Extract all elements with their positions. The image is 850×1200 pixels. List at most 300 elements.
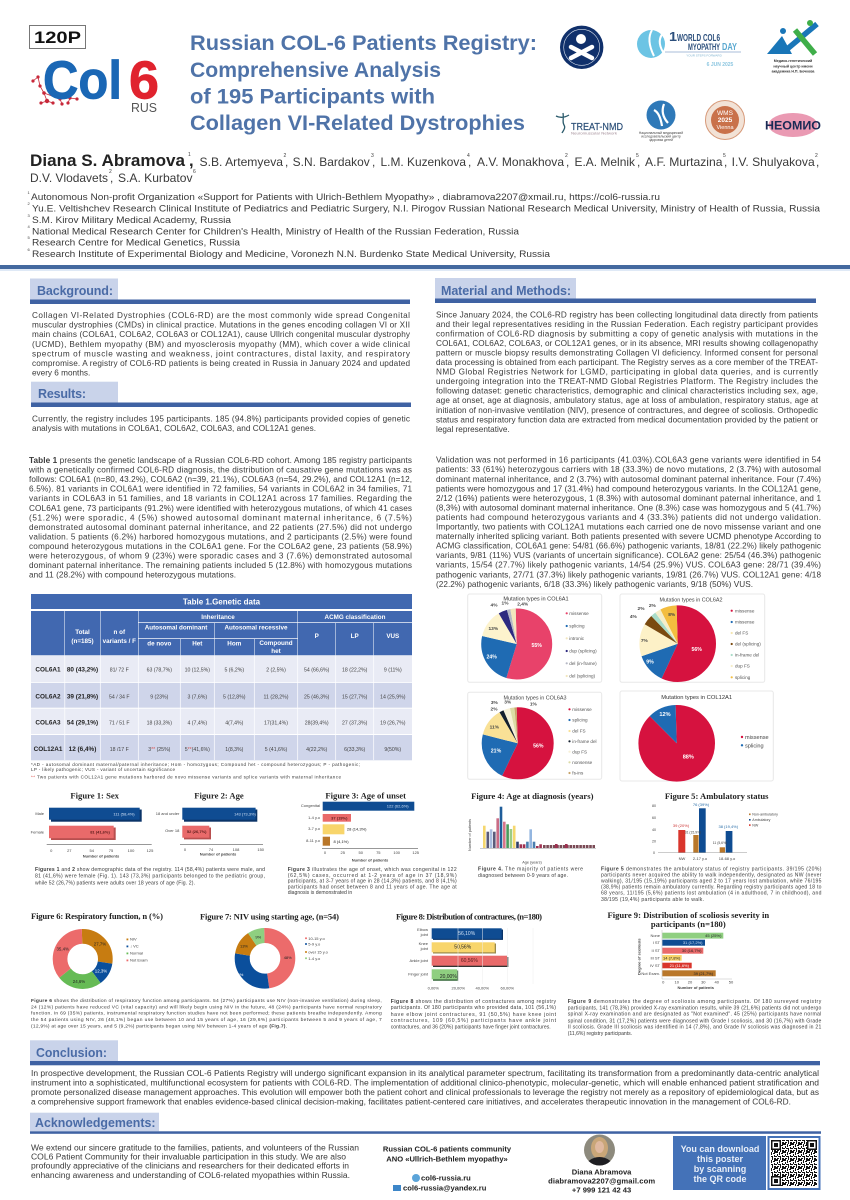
table: genetic data: P: [315, 633, 319, 640]
logo: NEOMIO: НЕОМИО: [765, 118, 821, 132]
table row: COL6A1: 81/ 72 F: [110, 668, 129, 674]
authors: ,: [110, 171, 113, 185]
chart: contractures bars: 50,56%: [454, 944, 472, 950]
chart: mutation types in COL6A3: 21%: [491, 748, 502, 754]
caption: figures 6 and 7: [31, 998, 382, 1030]
text: methods: legal representative.: [436, 425, 510, 434]
chart: mutation types in COL6A3: splicing: [572, 718, 588, 723]
chart: scoliosis severity bars: 31 (17,2%): [683, 940, 703, 945]
table: genetic data: Inheritance: [201, 614, 235, 621]
table row: COL6A2: 39 (21,8%): [67, 694, 98, 700]
text: methods: Since January 2024, the COL6-RD registry has been collecting longitudinal data directly from patients: [436, 310, 818, 319]
heading: figure 6: Figure 6: Respiratory function, n (%): [31, 911, 163, 921]
chart: NIV starting age donut: 48%: [284, 955, 292, 960]
heading: figure 1: Figure 1: Sex: [70, 790, 120, 800]
chart: mutation types in COL6A2: 56%: [692, 647, 702, 653]
poster number badge: 120P: [34, 28, 81, 47]
table footnotes: [31, 762, 360, 780]
chart: mutation types in COL6A2: del (splicing): [735, 642, 761, 647]
text: table 1 description: [28, 456, 412, 580]
chart: age of onset bars: 1-4 y.o: [308, 815, 321, 820]
caption: figure 5: (38,9%) patients remain ambulatory currently. Regarding registry participants aged 18 to: [601, 885, 822, 891]
table row: COL6A1: 10 (12,5%): [185, 668, 210, 674]
caption: figure 8: have elbow joint contractures, 91 (50,5%) have knee joint: [391, 1012, 557, 1018]
logo: national medical centre: Национальный медицинский: [639, 131, 683, 135]
icon: email envelope: [393, 1185, 401, 1191]
table row: COL12A1: 1(8,3%): [225, 747, 244, 753]
Col6 RUS logo: Col: [43, 50, 122, 110]
chart: NIV starting age donut: 5-9 y.o: [308, 942, 321, 946]
table row: COL6A2: 15 (27,7%): [342, 694, 368, 700]
authors: D.V. Vlodavets: [30, 171, 108, 185]
chart: mutation types in COL6A3: Mutation types in COL6A3: [504, 696, 566, 702]
icon: website globe: [412, 1174, 420, 1182]
panel: acknowledgements: [30, 1113, 821, 1180]
table row: COL12A1: 18 /17 F: [110, 747, 129, 753]
caption: figure 5: Figure 5 demonstrates the ambulatory status of registry participants. 39/195 (20%): [601, 866, 822, 872]
caption: figure 9: Figure 9 demonstrates the degree of scoliosis among participants. Of 180 surveyed registry: [568, 999, 822, 1005]
chart: scoliosis severity bars: None: [650, 933, 661, 938]
text: methods: undergoing integration into the TREAT-NMD Global Registries Platform. The Registry includes the: [436, 377, 818, 386]
chart: mutation types in COL6A1: dup (splicing): [569, 649, 597, 654]
chart: scoliosis severity bars: 45 (25%): [705, 933, 722, 938]
table row: COL6A1: COL6A1: [35, 666, 61, 674]
text: results: analysis with mutations in COL6A1, COL6A2, COL6A3, and COL12A1 genes.: [32, 424, 316, 433]
author contacts: diabramova2207@gmail.com: [548, 1176, 655, 1186]
chart: respiratory function donut: NIV: [130, 937, 137, 942]
text: conclusion: a comprehensive support framework that enables evidence-based clinical decision-making, facilitates patient-centered care initiatives, and accelerates therapeutic innovation in the management of COL6-RD.: [31, 1098, 791, 1107]
caption: figure 9: participants, 141 (78,3%) provided X-ray examination results, while 39 (21,6%) patients did not undergo: [568, 1005, 821, 1011]
panel: material and methods: [435, 278, 819, 434]
text: background: (UCMD), Bethlem myopathy (BM) and myosclerosis myopathy (MM), which cover a wide clinical: [32, 340, 410, 349]
text: table 1 description: with a genetically confirmed COL6-RD diagnosis, the distribution of causative gene mutations was as: [28, 466, 412, 475]
chart: age at diagnosis bars: Number of patients: [468, 819, 472, 851]
chart: mutation types in COL12A1: [620, 691, 773, 781]
chart: mutation types in COL12A1: 12%: [659, 712, 671, 718]
chart: mutation types in COL6A2: missense: [735, 620, 755, 625]
table row: COL6A1: 9 (11%): [384, 668, 402, 674]
caption: figures 6 and 7: Figure 6 shows the distribution of respiratory function among participants. 54 (27%) participants use NIV (non-invasive ventilation) during sleep,: [31, 998, 382, 1004]
table: genetic data: Total: [75, 629, 90, 636]
table row: COL12A1: [34, 746, 401, 753]
text: methods: and their legal representatives residing in the Russian Federation. Each registry participant provides: [436, 320, 818, 329]
text: validation and ACMG classification: Validation was not performed in 16 participants (41.03%).COL6A3 gene variants were identified in 54: [436, 456, 821, 465]
logo: World COL6 Myopathy Day: YOUR STEPS FORWARD: [686, 54, 723, 58]
poster number badge: [30, 26, 86, 48]
chart: ambulatory status bars: Ambulatory: [752, 818, 771, 822]
table row: COL6A3: 28(39,4%): [305, 720, 329, 726]
chart: contractures bars: joint: [420, 946, 429, 951]
chart: sex bars: 125: [147, 848, 154, 853]
text: methods: NMD Global Registries Network for LGMD, participating in global data queries, and is currently: [436, 368, 819, 377]
community contact block: Russian COL-6 patients community: [383, 1144, 512, 1153]
authors: S.B. Artemyeva: [200, 155, 283, 169]
table row: COL6A2: 25 (46,3%): [304, 694, 330, 700]
community contact block: col6-russia@yandex.ru: [403, 1184, 487, 1193]
chart: mutation types in COL6A3: 11%: [490, 724, 500, 730]
chart: age of onset bars: 8 (4,1%): [333, 839, 349, 844]
Col6 RUS logo: RUS: [131, 100, 157, 115]
logo: World COL6 Myopathy Day: 1: [669, 29, 677, 44]
table: genetic data: n of: [114, 629, 126, 636]
chart: age of onset bars: 8-11 y.o: [306, 838, 321, 843]
chart: sex bars: 111 (58,4%): [113, 812, 135, 816]
heading: acknowledgements: [30, 1113, 821, 1134]
logo: patient organization emblem: [560, 26, 603, 69]
chart: scoliosis severity bars: 40: [714, 980, 720, 984]
chart: age of onset bars: 25: [340, 850, 346, 855]
heading: figure 9: [607, 910, 769, 929]
caption: figure 5: 68 years, 11/195 (5,6%) patients lost ambulation (4 in adulthood, 7 in childhood), and: [601, 891, 822, 897]
authors: 5: [636, 153, 639, 159]
chart: ambulatory status bars: 39 (20%): [673, 823, 690, 828]
text: validation and ACMG classification: Importantly, two patients with COL12A1 mutations each carried one de novo missense variant and one: [436, 522, 821, 532]
table: genetic data: Autosomal recessive: [224, 624, 288, 632]
chart: mutation types in COL12A1: Mutation types in COL12A1: [661, 695, 732, 701]
authors: 4: [467, 153, 470, 159]
text: conclusion: instrument into a sophisticated, multifunctional ecosystem for patients with COL6-RD. The implementation of additional clinico-phenotypic, molecular-genetic, which will enable enhanced patient stratification and: [31, 1078, 819, 1088]
chart: age of onset bars: Congenital: [301, 803, 320, 808]
chart: contractures bars: 56,10%: [458, 931, 476, 937]
caption: figure 4: diagnosed between 0-9 years of age.: [478, 873, 568, 879]
chart: respiratory function donut: [56, 936, 148, 984]
chart: mutation types in COL6A3: in-frame del: [572, 739, 597, 744]
heading: figure 5: Figure 5: Ambulatory status: [665, 791, 769, 801]
logo: World COL6 Myopathy Day: DAY: [722, 42, 737, 53]
text: validation and ACMG classification: variants, 9/81 (11%) VUS (variants of uncertain significance). COL6A2 gene: 25/54 (46.3%) pathogenic: [436, 551, 821, 560]
table row: COL6A1: 2 (2,5%): [266, 668, 286, 674]
table row: COL6A1: [35, 666, 402, 674]
chart: age bars: Over 18: [165, 828, 180, 833]
text: table 1 description: 6.5%). 81 variants in COL6A1 were identified in 72 families, 54 variants in COL6A2 in 34 families, 71: [29, 485, 412, 494]
authors: ,: [637, 155, 640, 169]
table row: COL6A2: 11 (28,2%): [264, 694, 289, 700]
chart: mutation types in COL6A1: splicing: [569, 624, 585, 629]
chart: ambulatory status bars: 80: [652, 804, 656, 808]
authors: ,: [816, 155, 819, 169]
chart: scoliosis severity bars: 10: [674, 980, 680, 984]
table row: COL12A1: 6(33,3%): [344, 747, 365, 753]
chart: scoliosis severity bars: 50: [729, 980, 734, 984]
chart: ambulatory status bars: Non-ambulatory: [752, 812, 778, 816]
text: validation and ACMG classification: [436, 456, 821, 589]
chart: ambulatory status bars: NW: [679, 856, 686, 861]
chart: mutation types in COL6A3: missense: [572, 707, 592, 712]
text: methods: data processing is obtained from each participant. The Registry serves as a core member of the TREAT-: [436, 358, 818, 367]
title: Russian COL-6 Patients Registry:: [190, 31, 537, 55]
caption: figure 8: contractures, and 36 (20%) participants have finger joint contractures.: [391, 1025, 551, 1031]
chart: scoliosis severity bars: 14 (7,8%): [663, 955, 681, 960]
table: genetic data: ACMG classification: [325, 614, 386, 621]
chart: ambulatory status bars: 76 (39%): [693, 802, 710, 807]
chart: mutation types in COL12A1: missense: [745, 735, 769, 741]
chart: mutation types in COL6A3: 3%: [491, 700, 498, 706]
chart: ambulatory status bars: NW: [752, 823, 759, 827]
chart: respiratory function donut: Not Exam: [130, 958, 148, 963]
text: validation and ACMG classification: patients: 33 (61%) heterozygous carriers with 18 (33.3%) de novo mutations, 2 (3.7%) with autosomal: [436, 465, 821, 474]
heading: figure 9: Figure 9: Distribution of scoliosis severity in: [607, 910, 769, 920]
text: validation and ACMG classification: pathogenic variants, 27/71 (37.3%) likely pathogenic variants, 19/81 (26.7%) VUS. COL12A1 gene: 4/18: [436, 570, 821, 579]
table row: COL6A2: 54 / 34 F: [109, 694, 130, 700]
authors: S.A. Kurbatov: [118, 171, 193, 185]
chart: sex bars: Male: [35, 811, 45, 816]
caption: figures 6 and 7: function. In 69 (35%) patients, instrumental respiratory function studies have not been performed; these patients breathe independently. Among: [31, 1011, 382, 1017]
text: validation and ACMG classification: 2/12 (16%) patients were heterozygous, 1 (8.3%) with autosomal dominant paternal inheritance, and 1: [436, 494, 821, 503]
table: genetic data: de novo: [147, 640, 172, 648]
authors: ,: [285, 155, 288, 169]
heading: background: [30, 278, 410, 304]
chart: age bars: 143 (73,3%): [234, 812, 257, 816]
chart: mutation types in COL6A1: 1%: [502, 600, 509, 606]
logo: NEOMIO: [765, 113, 821, 137]
chart: mutation types in COL6A1: Mutation types in COL6A1: [503, 596, 569, 602]
author contacts: +7 999 121 42 43: [572, 1186, 631, 1194]
chart: age at diagnosis bars: Age (years): [522, 860, 543, 864]
chart: mutation types in COL6A1: 55%: [532, 643, 542, 649]
chart: mutation types in COL6A1: intronic: [569, 636, 585, 641]
community contact block: col6-russia.ru: [421, 1174, 471, 1182]
chart: contractures bars: 20,00%: [452, 986, 466, 990]
chart: mutation types in COL6A3: 56%: [533, 744, 544, 750]
logo: WMS 2025 Vienna: WMS: [717, 110, 734, 117]
text: validation and ACMG classification: patients were homozygous and 17 (31.4%) had compound heterozygous variants. In the COL12A1 gene,: [436, 484, 821, 493]
caption: figures 1 and 2: Figures 1 and 2 show demographic data of the registry. 114 (58,4%) patients were male, and: [35, 867, 265, 873]
chart: ambulatory status bars: [652, 802, 778, 861]
caption: figure 3: diagnosis is demonstrated in: [288, 890, 352, 896]
chart: age of onset bars: 37 (19%): [331, 815, 348, 820]
author photo: [584, 1134, 615, 1166]
panel: results: [31, 382, 411, 433]
chart: mutation types in COL6A2: 2%: [649, 603, 656, 609]
author contacts: Diana Abramova: [572, 1168, 632, 1176]
table row: COL6A3: 4(7,4%): [225, 720, 244, 726]
authors: 2: [565, 153, 568, 159]
text: validation and ACMG classification: dominant maternal inheritance, and 2 (3.7%) with autosomal dominant paternal inheritance. Four (7.4%): [436, 475, 821, 484]
heading: material and methods: Material and Methods:: [441, 284, 571, 298]
caption: figure 9: II scoliosis. Grade III scoliosis was identified in 14 (7,8%), and Grade IV scoliosis was diagnosed in 21: [568, 1025, 821, 1031]
text: table 1 description: dominant paternal inheritance. The remaining patients included 5 (12.8%) with homozygous mutations: [29, 561, 412, 570]
affiliations: [28, 190, 821, 260]
chart: NIV starting age donut: 1-4 y.o: [308, 956, 321, 961]
heading: figure 9: participants (n=180): [651, 919, 726, 929]
logo: TREAT-NMD: Neuromuscular Network: [571, 132, 617, 136]
heading: background: Background:: [37, 284, 113, 298]
chart: contractures bars: Finger joint: [408, 972, 429, 976]
caption: figures 1 and 2: 81 (41,6%) were female (Fig. 1). 143 (73,3%) participants belonged to the pediatric group,: [35, 874, 265, 880]
logo: medical genetics research centre: Медико-генетический: [774, 59, 812, 63]
caption: figure 3: participants had onset between 8 and 11 years of age. The age at: [288, 884, 457, 890]
text: methods: pattern or muscle biopsy results demonstrating Collagen VI deficiency. Informed consent for personal: [436, 348, 818, 358]
chart: age bars: 74: [209, 847, 214, 852]
chart: respiratory function donut: 27,7%: [94, 942, 106, 946]
QR code: [768, 1136, 820, 1190]
text: acknowledgements: We extend our sincere gratitude to the families, patients, and volunteers of the Russian: [31, 1144, 359, 1152]
caption: figures 6 and 7: 24 (12%) patients have reduced VC (vital capacity) and will likely begin using NIV in the future, 48 (24%) participants have normal respiratory: [31, 1004, 382, 1010]
chart: scoliosis severity bars: I ST: [653, 940, 661, 945]
table: genetic data: Compound: [259, 640, 293, 647]
chart: NIV starting age donut: 10-15 y.o: [308, 936, 325, 941]
chart: ambulatory status bars: 31 (15,9%): [685, 830, 701, 834]
chart: ambulatory status bars: 0: [653, 851, 655, 855]
text: acknowledgements: [31, 1144, 359, 1180]
table row: COL6A1: 18 (22,2%): [342, 668, 368, 674]
logo: World COL6 Myopathy Day: MYOPATHY: [688, 42, 720, 53]
authors: 2: [109, 169, 112, 175]
affiliations: 1: [28, 190, 30, 195]
chart: sex bars: Female: [31, 830, 45, 834]
table row: COL6A2: COL6A2: [35, 694, 61, 700]
chart: contractures bars: Ankle joint: [410, 958, 429, 963]
authors: Diana S. Abramova: [30, 152, 186, 170]
chart: ambulatory status bars: 2-17 y.o: [693, 856, 708, 861]
authors: ,: [372, 155, 375, 169]
authors: ,: [189, 152, 194, 170]
table: genetic data: Het: [192, 640, 203, 648]
heading: figure 7: Figure 7: NIV using starting age, (n=54): [200, 912, 339, 922]
heading: material and methods: [435, 278, 816, 303]
chart: scoliosis severity bars: Not Exam.: [641, 971, 660, 976]
title: [190, 31, 537, 135]
chart: scoliosis severity bars: II ST: [652, 948, 661, 953]
table: genetic data: Hom: [227, 640, 242, 648]
chart: contractures bars: 60,56%: [461, 958, 478, 964]
chart: scoliosis severity bars: Number of patients: [677, 985, 715, 990]
logo: TREAT-NMD: [556, 113, 623, 136]
table row: COL6A3: [35, 720, 406, 726]
author contacts: [548, 1168, 655, 1194]
caption: figure 3: (62,5%) cases, occurred at 1-2 years of age in 37 (18,9%): [288, 873, 457, 879]
heading: conclusion: [30, 1040, 820, 1065]
caption: figure 5: 38/195 (19,4%) participants able to walk.: [601, 897, 704, 903]
chart: mutation types in COL6A1: missense: [569, 611, 589, 616]
table row: COL12A1: 4(22,2%): [306, 747, 327, 753]
chart: age bars: 108: [233, 847, 240, 852]
chart: mutation types in COL6A3: 1%: [530, 702, 537, 708]
text: acknowledgements: enhancing awareness and understanding of COL6-related myopathies within Russia.: [31, 1171, 350, 1180]
text: table 1 description: variants in COL6A3 in 51 families, and 18 variants in COL12A1 across 17 families. Regarding the: [29, 494, 412, 503]
chart: respiratory function donut: 35,4%: [56, 946, 69, 952]
caption: figure 8: Figure 8 shows the distribution of contractures among registry: [391, 999, 556, 1005]
text: validation and ACMG classification: maternally inherited splicing variant. Both patients presented with severe UCMD phenotype According to: [436, 532, 821, 541]
chart: ambulatory status bars: 38 (19,4%): [719, 824, 739, 829]
chart: mutation types in COL6A3: nonsense: [572, 760, 593, 765]
chart: respiratory function donut: 24,6%: [73, 979, 85, 984]
table row: COL12A1: 9(50%): [384, 747, 401, 753]
chart: age bars: [156, 808, 265, 856]
chart: age bars: Number of patients: [200, 852, 237, 856]
caption: figure 3: Figure 3 illustrates the age of onset, which was congenital in 122: [288, 867, 457, 873]
logo: World COL6 Myopathy Day: WORLD COL6: [677, 32, 720, 44]
affiliations: Yu.E. Veltishchev Research Clinical Institute of Pediatrics and Pediatric Surgery, N.I. Pirogov Russian National Research Medical University, Ministry of Health of Russia, Russia: [32, 204, 821, 214]
authors: A.F. Murtazina: [645, 155, 723, 169]
text: validation and ACMG classification: patients had compound heterozygous variants and 4 (33.3%) patients did not undergo validation.: [436, 513, 821, 522]
authors: 6: [193, 169, 196, 175]
chart: mutation types in COL6A2: 2%: [638, 606, 645, 612]
text: results: [32, 414, 410, 433]
text: table 1 description: (51.2%) were sporadic, 4 (5%) showed autosomal dominant maternal inheritance, 6 (7.5%): [29, 513, 412, 522]
chart: ambulatory status bars: 11 (5,6%): [713, 841, 727, 845]
logo: WMS 2025 Vienna: Vienna: [716, 125, 734, 131]
chart: contractures bars: 60,00%: [501, 986, 515, 990]
caption: figure 9: spinal X-ray examination and are designated as "Not examined". 45 (25%) participants have normal: [568, 1012, 821, 1018]
chart: mutation types in COL6A2: dup FS: [735, 664, 750, 669]
chart: mutation types in COL6A2: del FS: [735, 631, 748, 636]
chart: mutation types in COL6A2: splicing: [735, 675, 751, 680]
heading: figure 8: Figure 8: Distribution of contractures, (n=180): [396, 911, 542, 921]
authors: ,: [724, 155, 727, 169]
table row: COL12A1: 12 (6,4%): [69, 746, 96, 753]
logo: World COL6 Myopathy Day: 6 JUN 2025: [707, 62, 734, 68]
authors: [30, 152, 819, 185]
chart: age of onset bars: 125: [412, 850, 420, 855]
table row: COL6A1: 5 (6,2%): [224, 668, 244, 674]
chart: scoliosis severity bars: [636, 930, 734, 990]
authors: I.V. Shulyakova: [732, 155, 815, 169]
chart: mutation types in COL6A2: 9%: [646, 660, 654, 666]
caption: figures 6 and 7: (12,9%) at age over 15 years, and 5 (9,2%) participants began using NIV between 1-4 years of age (Fig.7).: [31, 1024, 287, 1030]
chart: mutation types in COL6A1: [468, 594, 602, 682]
Col6 RUS logo: 6: [129, 50, 159, 110]
text: methods: COL6A1, COL6A2, COL6A3, or COL12A1 genes, or in its absence, MRI results showing collagenopathy: [436, 339, 819, 348]
table: genetic data: variants / F: [103, 638, 136, 645]
chart: mutation types in COL6A1: del (splicing): [569, 674, 596, 679]
text: table 1 description: COL6A1 gene, 73 participants (91.2%) were identified with heterozygous mutations, of which 41 cases: [29, 504, 412, 513]
caption: figure 5: [601, 866, 822, 903]
table row: COL6A3: 4 (7,4%): [187, 720, 207, 726]
chart: mutation types in COL12A1: splicing: [745, 743, 764, 749]
logo: World COL6 Myopathy Day: [637, 29, 741, 68]
caption: figure 9: (11,6%) registry participants.: [568, 1031, 632, 1037]
title: Collagen VI-Related Dystrophies: [190, 111, 525, 135]
affiliations: Autonomous Non-profit Organization «Support for Patients with Ulrich-Bethlem Myopathy» , diabramova2207@xmail.ru, https://col6-russia.ru: [31, 192, 660, 203]
chart: sex bars: 75: [109, 848, 114, 853]
chart: mutation types in COL6A1: 24%: [487, 654, 497, 660]
logo: national medical centre: исследовательский центр: [641, 134, 681, 138]
chart: age of onset bars: 50: [358, 850, 364, 855]
heading: figure 3: Figure 3: Age of unset: [325, 790, 406, 800]
table row: COL6A2: [35, 694, 406, 700]
affiliations: 4: [28, 224, 30, 229]
authors: 2: [284, 153, 286, 159]
caption: figure 8: participants. Of 180 participants who provided data, 101 (56,1%): [391, 1005, 556, 1011]
chart: contractures bars: 0,00%: [428, 986, 439, 990]
chart: age bars: 52 (26,7%): [187, 829, 207, 834]
chart: respiratory function donut: ↓ VC: [130, 944, 139, 949]
heading: figure 2: Figure 2: Age: [194, 790, 244, 800]
text: background: every 6 months.: [32, 368, 90, 378]
chart: age of onset bars: 0: [324, 850, 327, 855]
chart: scoliosis severity bars: 0: [662, 980, 665, 984]
chart: mutation types in COL6A1: 13%: [488, 626, 499, 632]
chart: age of onset bars: 75: [376, 850, 381, 855]
logo: TREAT-NMD: TREAT-NMD: [571, 121, 623, 133]
chart: ambulatory status bars: 60: [652, 816, 656, 820]
caption: figure 8: contractures, 109 (60,5%) participants have ankle joint: [391, 1018, 557, 1024]
chart: mutation types in COL6A3: [468, 692, 602, 779]
chart: age bars: 150: [257, 847, 265, 852]
chart: age bars: 18 and under: [156, 811, 180, 816]
text: methods: following dataset: genetic characteristics, demographic and clinical characteristics including sex, age,: [436, 387, 818, 396]
text: acknowledgements: profoundly appreciative of the clinicians and researchers for their dedicated efforts in: [31, 1162, 349, 1171]
chart: mutation types in COL6A3: 2%: [491, 706, 498, 712]
heading: results: Results:: [38, 387, 86, 401]
chart: mutation types in COL6A2: Mutation types in COL6A2: [660, 598, 722, 604]
text: background: main chains (COL6A1, COL6A2, COL6A3 or COL12A1), cause Ullrich congenital muscular dystrophy: [32, 330, 411, 339]
chart: mutation types in COL6A2: 8%: [668, 612, 676, 618]
authors: A.V. Monakhova: [477, 155, 564, 169]
panel: conclusion: [30, 1040, 820, 1107]
panel: background: [30, 278, 411, 378]
